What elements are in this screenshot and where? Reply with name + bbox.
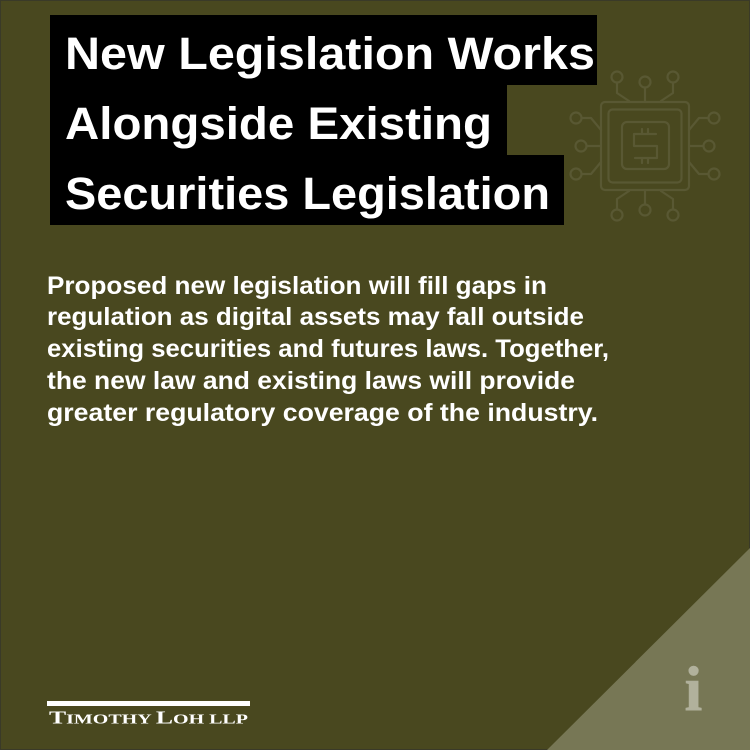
title line 2: Alongside Existing [65, 98, 492, 149]
title line 1: New Legislation Works [65, 28, 595, 79]
corner triangle with info icon [547, 548, 750, 750]
title [50, 15, 597, 225]
title line 3 [50, 155, 564, 225]
logo: Timothy Loh LLP [47, 701, 250, 728]
body text: Proposed new legislation will fill gaps in [47, 272, 547, 300]
icon: info letter i: i [684, 653, 702, 724]
body text: existing securities and futures laws. Together, [47, 335, 609, 363]
title line 3: Securities Legislation [65, 168, 550, 219]
body text: greater regulatory coverage of the industry. [47, 399, 598, 427]
body text: regulation as digital assets may fall outside [47, 303, 584, 331]
body text: the new law and existing laws will provide [47, 367, 575, 395]
logo: Timothy Loh LLP: T IMOTHY L OH LLP [49, 708, 249, 728]
body text [47, 272, 609, 427]
title line 2 [50, 85, 507, 155]
icon: circuit chip with dollar sign [570, 72, 720, 220]
title line 1 [50, 15, 597, 85]
